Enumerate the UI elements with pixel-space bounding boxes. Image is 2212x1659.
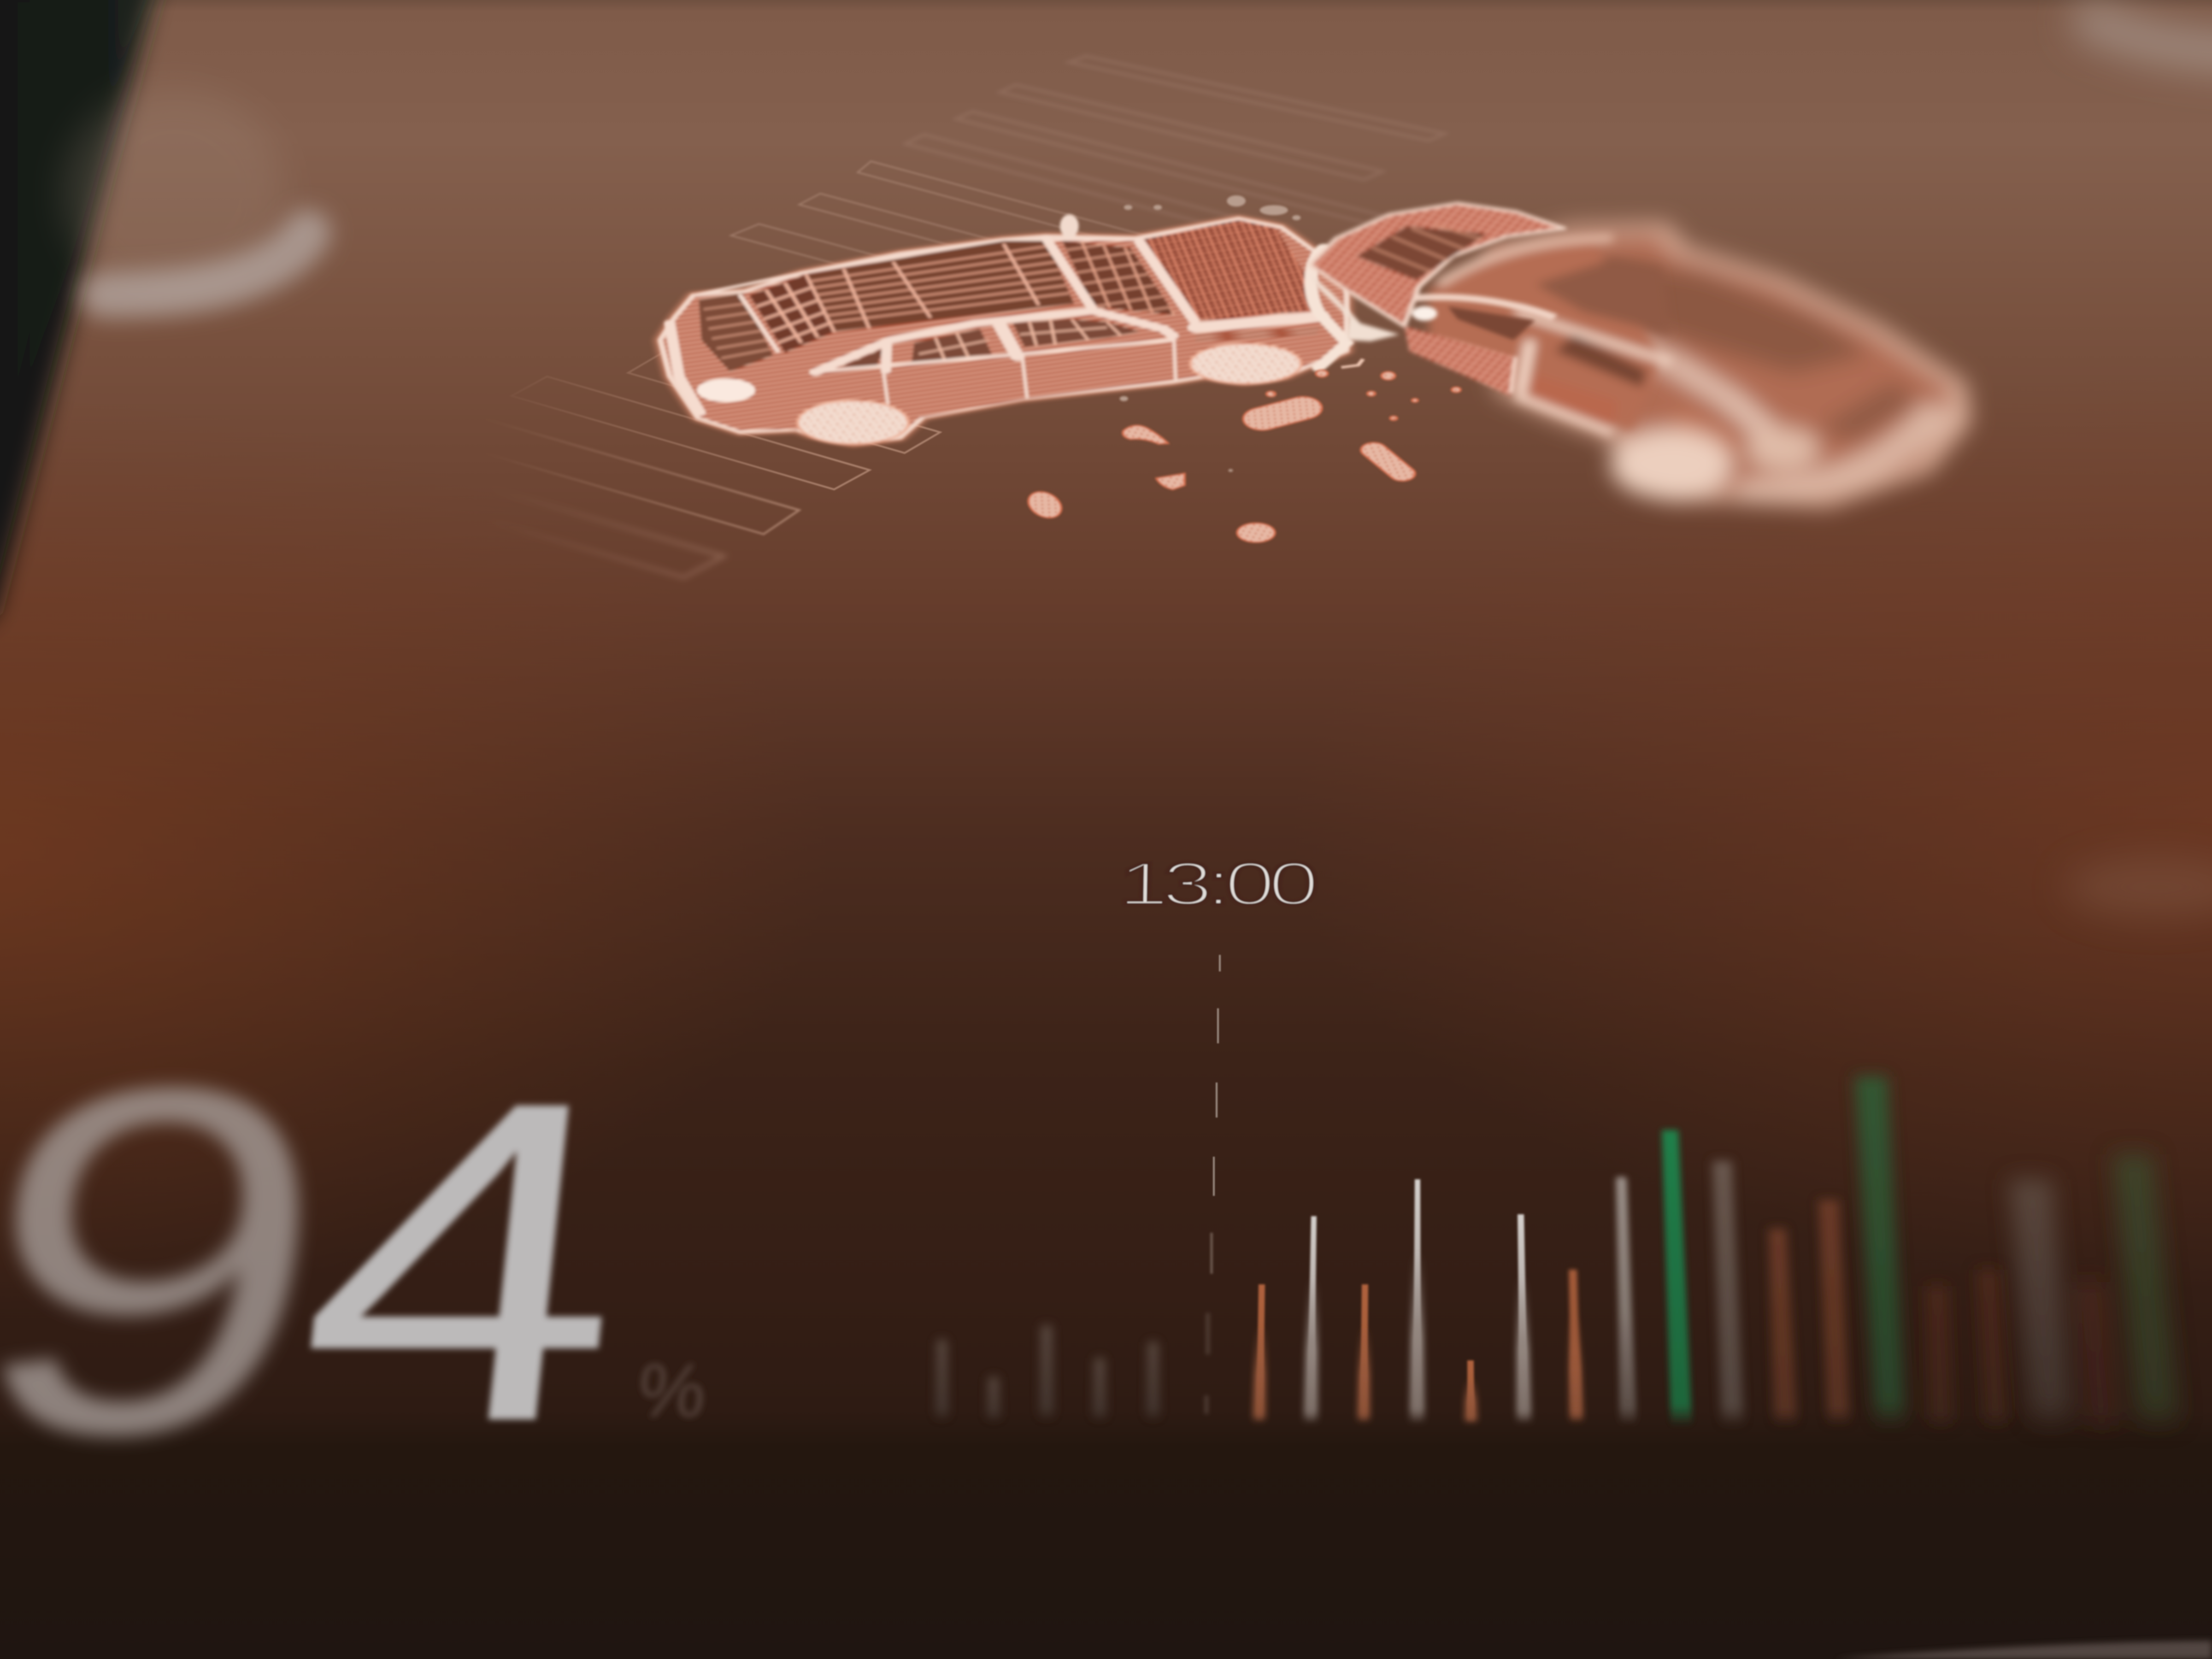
right car: window frame xyxy=(1414,297,1554,318)
bar chart xyxy=(935,1077,2180,1429)
right car: pillar xyxy=(1511,357,1516,393)
right car: rear window xyxy=(1817,382,1918,441)
right car far section (out of focus) xyxy=(1496,228,1962,502)
right car: tail lamp xyxy=(1746,428,1819,470)
faint blurred element top-right xyxy=(2092,21,2212,53)
left car wireframe xyxy=(660,214,1347,444)
in-focus bar tops xyxy=(1256,1179,1528,1424)
mid-focus white highlight xyxy=(1618,1177,1634,1425)
debris: small chips xyxy=(1266,359,1460,420)
lowest stripe xyxy=(407,476,724,577)
dashes in focus xyxy=(1214,955,1220,1196)
bars before marker (dim) xyxy=(935,1325,1159,1419)
right car: front side window xyxy=(1448,306,1535,340)
left car: trunk xyxy=(699,293,773,371)
lower stripes xyxy=(512,352,940,489)
left car: side windows xyxy=(841,319,1140,366)
left car glow halo xyxy=(660,218,1347,443)
right car: lower wheel xyxy=(1610,429,1732,499)
left car: crumpled nose xyxy=(1311,248,1347,368)
right car mid section xyxy=(1429,237,1671,434)
debris: small blob xyxy=(1123,425,1168,444)
debris: large pill xyxy=(1237,393,1328,434)
blurred bars xyxy=(1855,1077,2008,1428)
dark foreground wedge at top-left xyxy=(0,0,159,645)
debris: grey fragments xyxy=(1120,195,1300,472)
right car near section xyxy=(1310,203,1565,396)
far blurred bars xyxy=(2009,1154,2180,1429)
faint arc bottom right xyxy=(1834,1641,2212,1659)
left car: silhouette xyxy=(660,218,1347,443)
left car: lamp glow xyxy=(697,378,755,402)
lower blurred stripe xyxy=(441,417,799,534)
left car: hood xyxy=(1135,220,1323,320)
right car: impact lamp xyxy=(1412,306,1437,321)
left car: body side xyxy=(698,326,1318,429)
crash debris xyxy=(1023,195,1460,542)
right car: mid roof edge xyxy=(1438,238,1613,284)
left car: pale frame lines xyxy=(670,218,1321,412)
right car: hood xyxy=(1310,203,1565,326)
left car: front wheel xyxy=(1190,344,1301,384)
right car: mid panels xyxy=(1530,374,1618,427)
left car: roof antenna xyxy=(1060,214,1079,238)
large percentage value xyxy=(0,985,710,1536)
debris: lower chip xyxy=(1237,523,1275,542)
right car: side panel xyxy=(1676,412,1734,469)
right car: mid body xyxy=(1429,237,1661,429)
left car: main roof xyxy=(806,238,1074,332)
dashed time marker xyxy=(1206,955,1220,1414)
percent sign: % xyxy=(635,1348,710,1433)
debris: long pill xyxy=(1356,440,1420,484)
right car: mid roof shade xyxy=(1535,259,1671,335)
right car: mid side glass xyxy=(1554,335,1647,388)
perspective grid stripes under the cars xyxy=(407,56,1445,577)
left car: rear roof panel xyxy=(750,274,834,353)
right car: silhouette xyxy=(1496,228,1962,502)
dashes blurred xyxy=(1206,1313,1208,1414)
right car: frame xyxy=(1632,346,1778,441)
soft bars xyxy=(1712,1161,1850,1426)
faint blurred gauge top-left xyxy=(65,88,308,300)
right car: rear arc xyxy=(1739,407,1942,491)
right car: roof xyxy=(1535,259,1870,374)
gauge haze xyxy=(65,88,286,300)
mid-focus orange bar xyxy=(1569,1270,1582,1423)
faint blurred label right edge xyxy=(2065,857,2212,917)
upper stripes xyxy=(731,161,1198,329)
left car: windshield xyxy=(1062,241,1175,315)
debris: centre chip xyxy=(1156,474,1184,489)
time label: 13:00 xyxy=(1118,850,1317,918)
dashes softening xyxy=(1210,1233,1213,1274)
debris: left chip xyxy=(1023,489,1067,521)
green focal bar xyxy=(1662,1130,1692,1426)
right car: mid frame xyxy=(1516,312,1671,434)
right car: crumpled junction xyxy=(1310,273,1400,341)
right car: side panel xyxy=(1404,326,1516,396)
digit 4: 4 xyxy=(280,1006,651,1516)
left car: rear wheel xyxy=(798,400,908,444)
mid-focus white bar xyxy=(1615,1177,1637,1425)
right car: windshield stripes xyxy=(1357,224,1487,280)
gauge arc xyxy=(104,233,308,295)
in-focus bar bottoms (soft) xyxy=(1253,1179,1583,1424)
far upper stripes xyxy=(906,56,1445,235)
